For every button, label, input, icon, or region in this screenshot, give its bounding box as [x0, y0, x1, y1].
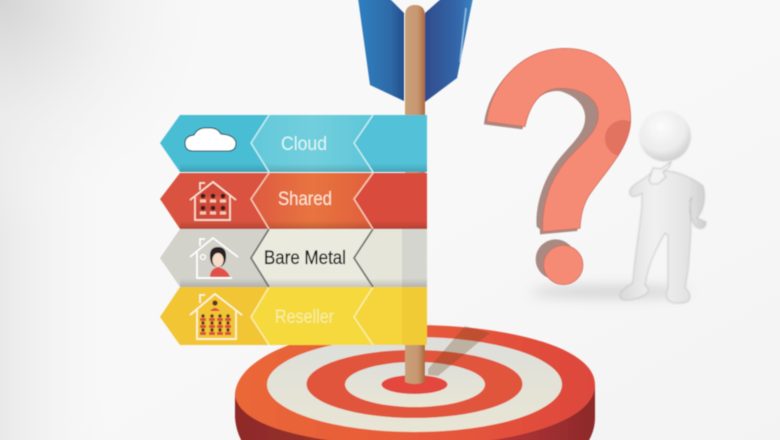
- figure hand: [649, 162, 671, 184]
- figure head: [639, 110, 691, 162]
- icon: bare metal house: [190, 238, 238, 278]
- question mark: [484, 48, 642, 285]
- target board: [235, 325, 595, 440]
- label: Cloud: Cloud: [281, 134, 327, 155]
- arrow fletching: [358, 0, 473, 102]
- sign: bare metal: [160, 229, 427, 287]
- figure body: [620, 171, 706, 303]
- question mark dot: [536, 239, 583, 285]
- sign: cloud: [160, 115, 427, 172]
- icon: reseller house: [190, 294, 242, 339]
- icon: cloud: [185, 128, 236, 151]
- sign: shared: [160, 173, 427, 229]
- arrow shaft: [405, 5, 425, 384]
- ground shadow: [530, 286, 690, 298]
- label: Reseller: Reseller: [275, 307, 335, 328]
- label: Bare Metal: Bare Metal: [264, 248, 346, 269]
- thinking figure: [620, 110, 706, 303]
- label: Shared: Shared: [278, 189, 332, 210]
- sign: reseller: [160, 287, 427, 345]
- icon: shared house: [190, 182, 236, 220]
- signpost: [160, 115, 427, 345]
